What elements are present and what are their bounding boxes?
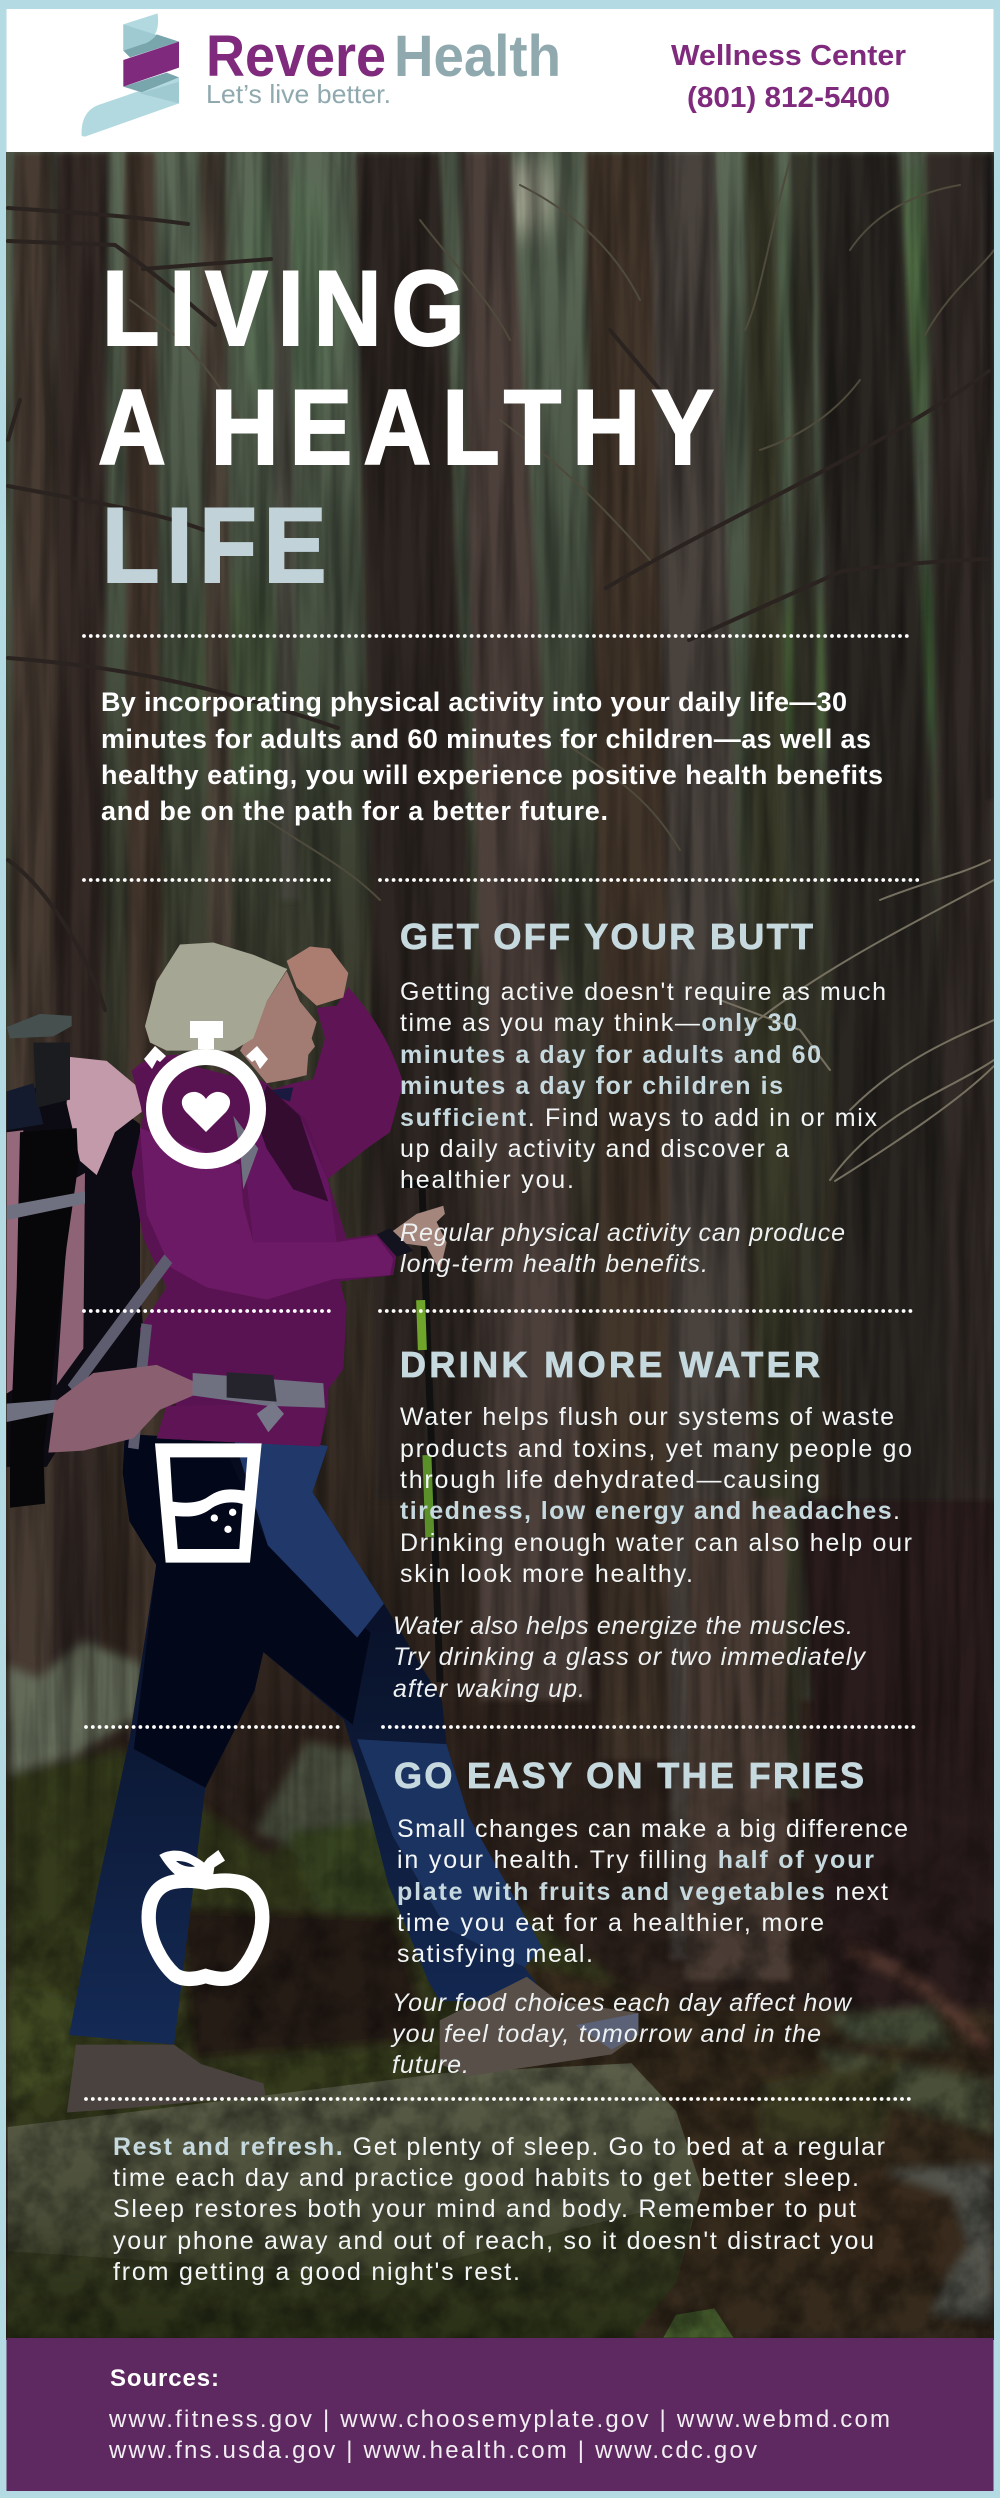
raised hand bbox=[287, 947, 348, 1006]
body text: minutes a day for adults and 60 bbox=[400, 1041, 821, 1069]
body text: Drinking enough water can also help our bbox=[400, 1529, 912, 1557]
italic note: future. bbox=[392, 2051, 469, 2079]
pack straps bbox=[72, 1259, 168, 1449]
body text: Water helps flush our systems of waste bbox=[400, 1403, 894, 1431]
jacket bbox=[132, 987, 403, 1181]
heading: GET OFF YOUR BUTT bbox=[400, 916, 813, 957]
heading: GO EASY ON THE FRIES bbox=[394, 1755, 864, 1796]
title: LIFE bbox=[102, 486, 326, 605]
hiker: upper body bbox=[7, 942, 447, 1508]
hip pouch bbox=[48, 1365, 193, 1453]
section: rest and refresh: time each day and practice good habits to get better sleep. bbox=[113, 2164, 859, 2192]
italic note bbox=[390, 1989, 853, 2079]
contact: wellness center: Wellness Center bbox=[671, 40, 906, 72]
body text: time you eat for a healthier, more bbox=[397, 1909, 824, 1937]
source links: www.fitness.gov | www.choosemyplate.gov | www.webmd.com bbox=[108, 2406, 890, 2433]
body text: Small changes can make a big difference bbox=[397, 1815, 908, 1843]
icon: apple bbox=[149, 1850, 262, 1979]
rocks and ground bbox=[8, 1641, 992, 2340]
icon: glass of water bbox=[155, 1443, 262, 1563]
body text: minutes a day for children is bbox=[400, 1072, 783, 1100]
hiker: pole bbox=[402, 1180, 440, 1682]
body text bbox=[400, 978, 886, 1194]
body text: tiredness, low energy and headaches. bbox=[400, 1497, 900, 1525]
title: A HEALTHY bbox=[98, 368, 714, 487]
italic note: Try drinking a glass or two immediately bbox=[393, 1643, 866, 1671]
hiker: legs and shoes bbox=[67, 1434, 638, 2113]
intro paragraph bbox=[101, 687, 883, 826]
body text: plate with fruits and vegetables next bbox=[397, 1878, 888, 1906]
logo tagline: Let’s live better. bbox=[206, 79, 391, 109]
body text: healthier you. bbox=[400, 1166, 574, 1194]
italic note bbox=[393, 1612, 866, 1703]
intro paragraph: minutes for adults and 60 minutes for children—as well as bbox=[101, 724, 871, 754]
italic note: you feel today, tomorrow and in the bbox=[390, 2020, 821, 2048]
section: rest and refresh: Sleep restores both your mind and body. Remember to put bbox=[113, 2195, 856, 2223]
sources heading: Sources: bbox=[110, 2365, 219, 2392]
italic note: Regular physical activity can produce bbox=[400, 1219, 845, 1247]
body text: sufficient. Find ways to add in or mix bbox=[400, 1104, 878, 1132]
tripod bbox=[10, 1128, 78, 1508]
source links: www.fns.usda.gov | www.health.com | www.cdc.gov bbox=[108, 2437, 757, 2464]
title: LIVING bbox=[102, 249, 465, 368]
section: go easy on the fries bbox=[390, 1755, 908, 2079]
body text: time as you may think—only 30 bbox=[400, 1009, 797, 1037]
body text: in your health. Try filling half of your bbox=[397, 1846, 874, 1874]
hip belt bbox=[193, 1373, 325, 1408]
face bbox=[240, 971, 317, 1083]
tree trunks bbox=[8, 152, 1000, 2020]
body text bbox=[400, 1403, 912, 1588]
big boulder bbox=[8, 2063, 733, 2338]
source links bbox=[108, 2406, 890, 2464]
italic note bbox=[400, 1219, 845, 1278]
section: rest and refresh: Rest and refresh. Get plenty of sleep. Go to bed at a regular bbox=[113, 2133, 885, 2161]
intro paragraph: healthy eating, you will experience positive health benefits bbox=[101, 760, 883, 790]
collar dark bbox=[257, 1085, 328, 1202]
branches bbox=[8, 208, 989, 1010]
heading: DRINK MORE WATER bbox=[400, 1344, 820, 1385]
foliage glow bbox=[180, 155, 945, 800]
italic note: Water also helps energize the muscles. bbox=[393, 1612, 853, 1640]
backpack bbox=[7, 1083, 147, 1467]
italic note: after waking up. bbox=[393, 1675, 585, 1703]
icon: stopwatch with heart bbox=[144, 1021, 268, 1161]
section: drink more water bbox=[393, 1344, 912, 1703]
section: rest and refresh bbox=[113, 2133, 885, 2286]
bark and moss texture bbox=[6, 152, 994, 1962]
logo wordmark: Health: Health bbox=[394, 24, 561, 89]
right rocks and root bbox=[827, 2005, 950, 2048]
section: rest and refresh: your phone away and out of reach, so it doesn't distract you bbox=[113, 2227, 874, 2255]
body text: satisfying meal. bbox=[397, 1940, 593, 1968]
intro paragraph: and be on the path for a better future. bbox=[101, 796, 608, 826]
logo wordmark: Revere: Revere bbox=[206, 24, 386, 89]
body text: through life dehydrated—causing bbox=[400, 1466, 820, 1494]
header panel bbox=[6, 9, 994, 152]
logo icon: ribbon bbox=[82, 13, 179, 137]
body text bbox=[397, 1815, 908, 1968]
section: rest and refresh: from getting a good night's rest. bbox=[113, 2258, 520, 2286]
lower hand bbox=[388, 1206, 447, 1271]
title bbox=[98, 249, 714, 605]
body text: Getting active doesn't require as much bbox=[400, 978, 886, 1006]
section: get off your butt bbox=[400, 916, 886, 1278]
divider dotted lines bbox=[84, 636, 918, 2099]
contact: phone: (801) 812-5400 bbox=[687, 82, 890, 114]
italic note: Your food choices each day affect how bbox=[392, 1989, 853, 2017]
body text: products and toxins, yet many people go bbox=[400, 1435, 912, 1463]
body text: skin look more healthy. bbox=[400, 1560, 693, 1588]
intro paragraph: By incorporating physical activity into your daily life—30 bbox=[101, 687, 847, 717]
italic note: long-term health benefits. bbox=[400, 1250, 708, 1278]
body text: up daily activity and discover a bbox=[400, 1135, 789, 1163]
head scarf bbox=[145, 942, 287, 1051]
footer: sources bbox=[6, 2338, 994, 2491]
